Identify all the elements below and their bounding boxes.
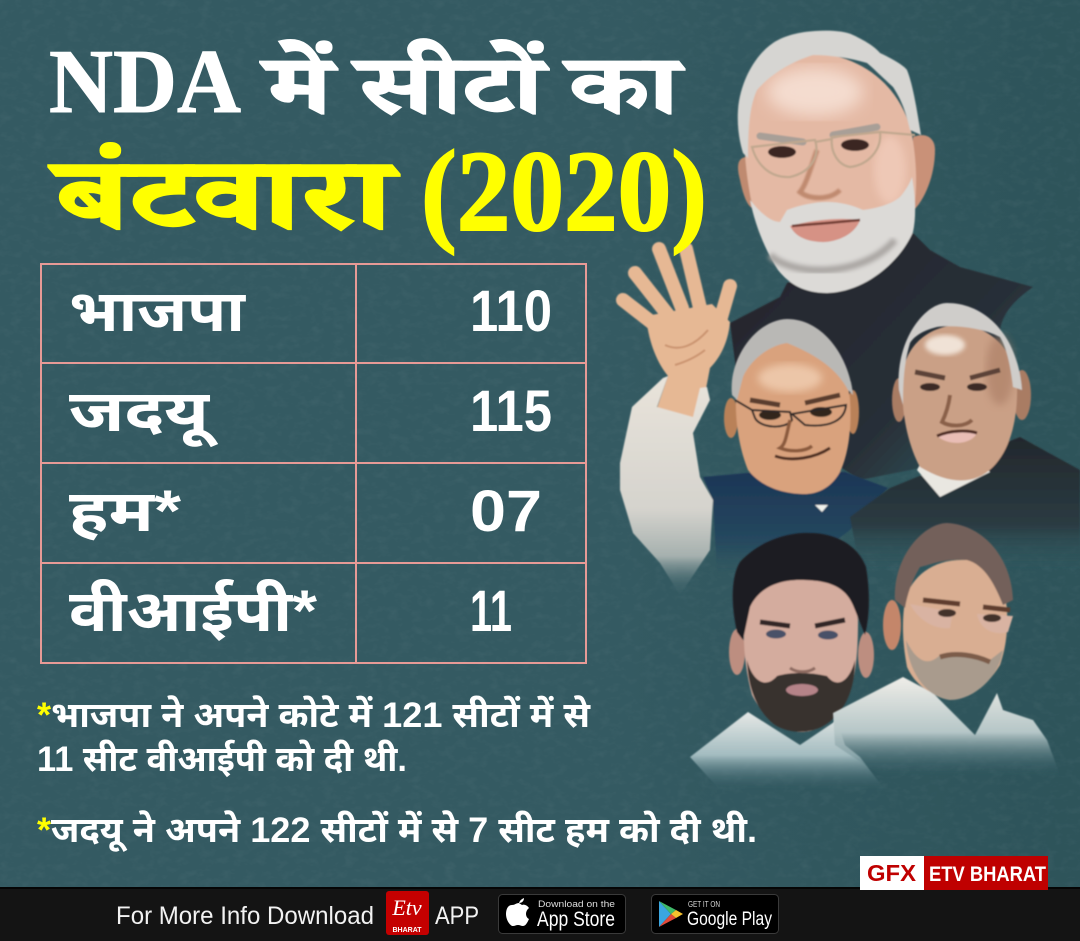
body	[730, 233, 1033, 480]
body	[833, 677, 1060, 775]
lips	[790, 219, 860, 242]
hair	[732, 319, 853, 400]
body	[850, 437, 1080, 585]
portrait: Manjhi	[850, 303, 1080, 585]
ears	[1013, 370, 1031, 420]
App Store badge	[498, 894, 626, 934]
App Store badge: App Store	[537, 908, 615, 931]
nose and smile	[780, 420, 812, 451]
glasses and eyes	[750, 395, 840, 405]
cheek shading	[874, 136, 906, 204]
Google Play badge: Google Play	[687, 909, 772, 930]
portrait: Chirag	[690, 533, 885, 790]
row: BJP: भाजपा	[69, 279, 246, 344]
footnote 1	[37, 695, 591, 779]
brows and eyes	[760, 620, 845, 626]
hair	[733, 533, 869, 640]
ears	[912, 135, 935, 212]
footer bar	[0, 887, 1080, 941]
mouth	[937, 431, 977, 443]
jacket	[703, 472, 888, 575]
row: JDU	[69, 379, 552, 448]
title line 2: Hindi: बंटवारा	[49, 139, 400, 250]
face	[902, 325, 1017, 480]
sleeve	[620, 376, 713, 595]
row: HAM: हम*	[69, 479, 182, 544]
face	[903, 560, 1007, 698]
ETV Bharat logo: Etv	[391, 895, 422, 920]
nose	[790, 668, 815, 672]
portrait: Kushwaha	[833, 523, 1060, 775]
row: BJP	[69, 279, 552, 344]
ETV Bharat logo	[386, 891, 429, 935]
footnote 2: *जदयू ने अपने 122 सीटों में से 7 सीट हम को दी थी.	[37, 810, 757, 852]
portrait: Modi	[730, 31, 1033, 480]
nose	[942, 395, 972, 426]
Google Play badge: GET IT ON	[688, 900, 720, 909]
title line 2: year: (2020)	[421, 128, 707, 255]
ears	[729, 629, 745, 675]
GFX ETV Bharat tag	[860, 856, 1048, 890]
row: JDU: जदयू	[69, 379, 219, 448]
beard	[747, 660, 855, 732]
hand	[623, 249, 730, 420]
nose	[800, 150, 840, 198]
table grid	[41, 264, 586, 663]
row: VIP: 11	[470, 579, 512, 644]
footnote 1: *भाजपा ने अपने कोटे में 121 सीटों में से	[37, 695, 591, 735]
row: VIP: वीआईपी*	[69, 579, 317, 644]
beard	[750, 177, 915, 293]
footnote 1: 11 सीट वीआईपी को दी थी.	[37, 739, 407, 779]
collar	[815, 505, 828, 512]
face	[744, 53, 916, 292]
hair	[738, 31, 921, 158]
GFX ETV Bharat tag: GFX	[867, 860, 917, 886]
forehead highlight	[767, 68, 863, 116]
glasses and eyes	[923, 600, 1010, 610]
apple icon	[506, 898, 529, 926]
portrait: Nitish with raised hand	[620, 249, 888, 595]
footer text: For More Info Download	[116, 902, 374, 930]
row: HAM: 07	[470, 479, 542, 544]
ETV Bharat logo: BHARAT	[392, 927, 422, 934]
hair	[895, 523, 1013, 608]
glasses and eyes	[760, 127, 877, 142]
title line 1: Hindi: में सीटों का	[259, 39, 685, 131]
row: JDU: 115	[470, 379, 552, 444]
App Store badge: Download on the	[538, 899, 615, 909]
brows and eyes	[915, 370, 1000, 378]
row: BJP: 110	[470, 279, 552, 344]
beard	[906, 640, 1003, 700]
title	[49, 31, 707, 255]
collar	[917, 455, 990, 497]
seat-sharing table	[41, 264, 586, 663]
face	[736, 343, 851, 494]
row: HAM	[69, 479, 542, 544]
body	[690, 712, 885, 790]
face	[744, 577, 858, 732]
ears	[724, 398, 738, 438]
play icon	[659, 901, 683, 927]
GFX ETV Bharat tag: ETV BHARAT	[929, 863, 1046, 886]
ear	[883, 600, 901, 650]
title line 1: NDA: NDA	[49, 31, 241, 132]
Google Play badge	[652, 894, 778, 934]
row: VIP	[69, 579, 512, 644]
APP label: APP	[435, 902, 479, 930]
hair	[899, 303, 1022, 405]
